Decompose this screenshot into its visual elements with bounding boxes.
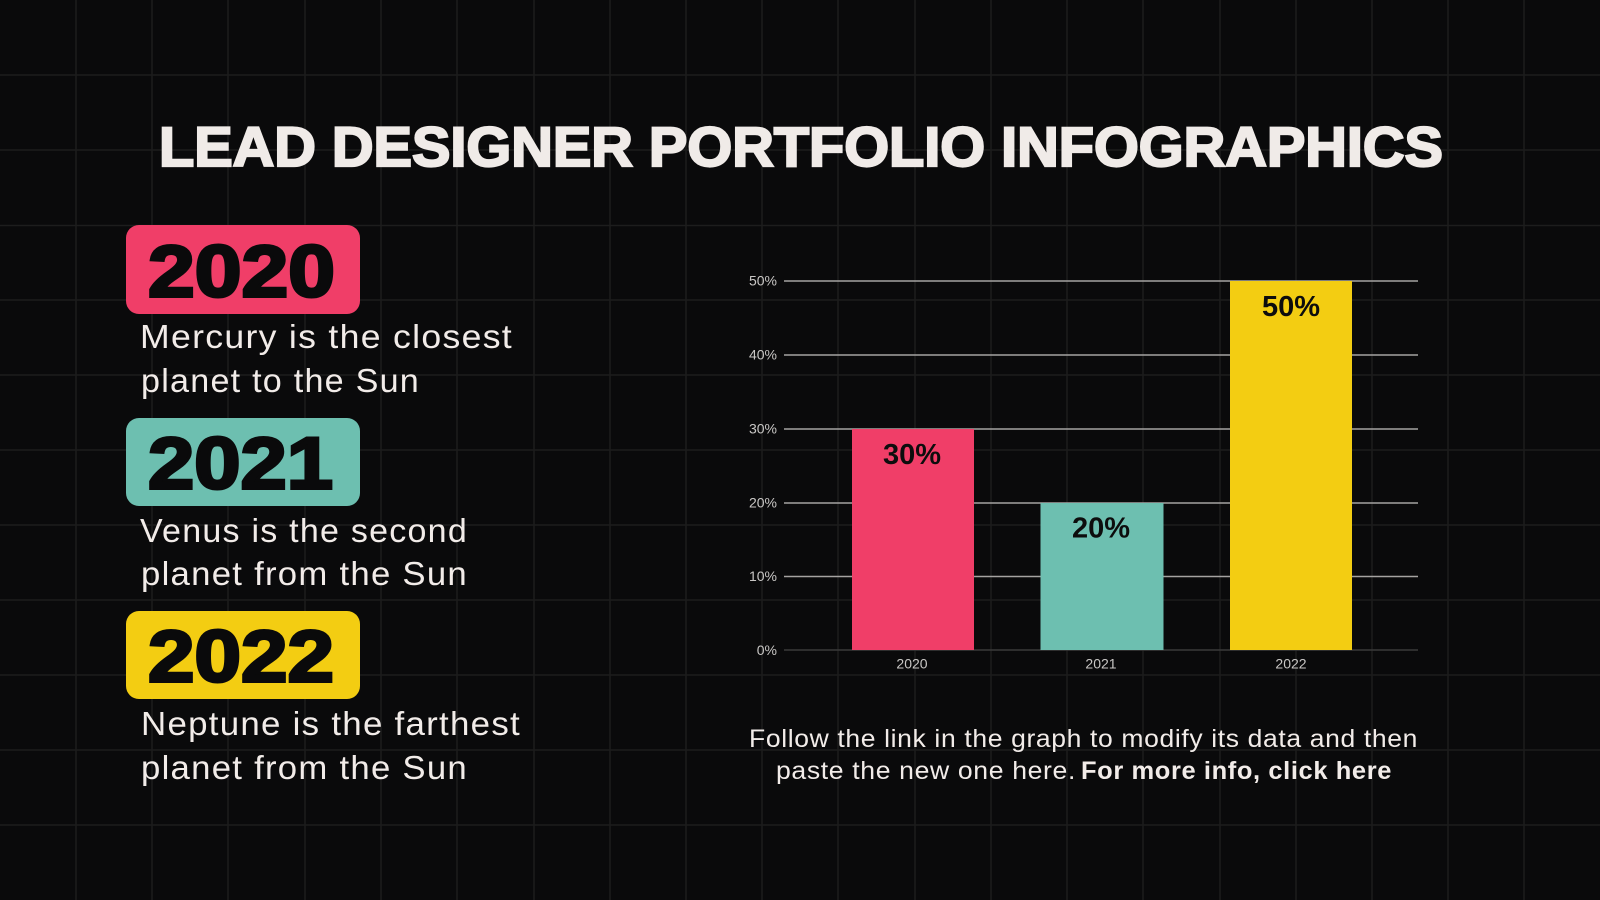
bar chart bbox=[749, 272, 1418, 672]
note text bbox=[749, 725, 1418, 785]
y axis labels bbox=[749, 272, 777, 658]
badge: 2022: 2022 bbox=[148, 616, 334, 698]
description: Mercury: planet to the Sun bbox=[141, 362, 420, 399]
badge: 2021 bbox=[126, 418, 360, 506]
entry: 2021 bbox=[126, 418, 468, 592]
panel: year entries bbox=[126, 225, 521, 786]
description: Venus: Venus is the second bbox=[140, 512, 468, 549]
y axis labels: 10% bbox=[749, 568, 777, 584]
title: LEAD DESIGNER PORTFOLIO INFOGRAPHICS bbox=[159, 115, 1443, 178]
entry: 2020 bbox=[126, 225, 513, 399]
note text: Follow the link in the graph to modify its data and then bbox=[749, 725, 1418, 753]
y axis labels: 40% bbox=[749, 346, 777, 362]
bar: 2020: 30% bbox=[883, 439, 941, 471]
y axis labels: 50% bbox=[749, 272, 777, 288]
badge: 2022 bbox=[126, 611, 360, 699]
badge: 2020 bbox=[126, 225, 360, 314]
bar: 2020 bbox=[852, 429, 974, 650]
note text: For more info, click here bbox=[1081, 757, 1392, 785]
description: Mercury: Mercury is the closest bbox=[140, 318, 513, 355]
bar: 2021 bbox=[1040, 503, 1164, 650]
description: Venus: planet from the Sun bbox=[141, 555, 468, 592]
y axis labels: 0% bbox=[757, 642, 777, 658]
bar: 2021: 20% bbox=[1072, 512, 1130, 544]
description: Venus bbox=[140, 512, 468, 592]
description: Mercury bbox=[140, 318, 513, 399]
badge: 2020: 2020 bbox=[148, 232, 335, 312]
note text: paste the new one here. bbox=[776, 757, 1076, 785]
x axis labels bbox=[896, 656, 1307, 672]
y axis labels: 30% bbox=[749, 420, 777, 436]
description: Neptune: Neptune is the farthest bbox=[141, 705, 521, 742]
description: Neptune bbox=[141, 705, 521, 786]
bar: 2022: 50% bbox=[1262, 291, 1320, 323]
badge: 2021: 2021 bbox=[148, 424, 333, 504]
bar: 2022 bbox=[1230, 281, 1352, 650]
description: Neptune: planet from the Sun bbox=[141, 749, 468, 786]
y axis labels: 20% bbox=[749, 494, 777, 510]
x axis labels: 2020 bbox=[896, 656, 928, 672]
x axis labels: 2022 bbox=[1275, 656, 1307, 672]
entry: 2022 bbox=[126, 611, 521, 786]
x axis labels: 2021 bbox=[1085, 656, 1117, 672]
